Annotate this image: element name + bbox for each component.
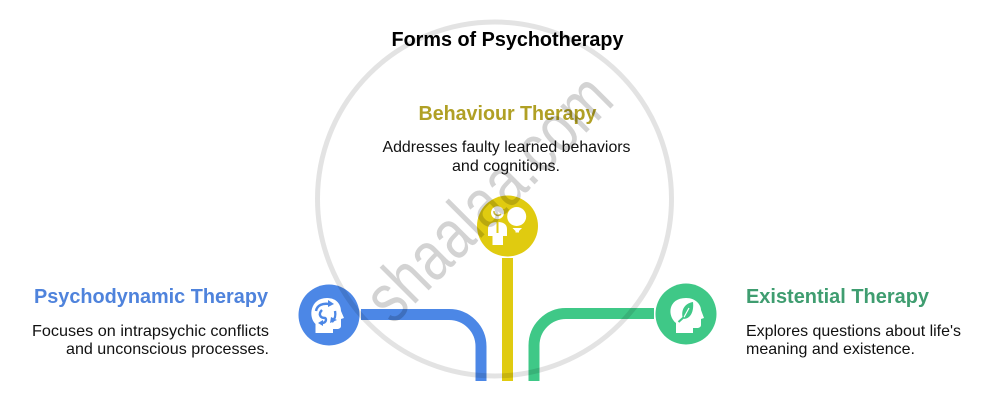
text: behaviour description: and cognitions.: [452, 158, 560, 175]
text: behaviour description: Addresses faulty learned behaviors: [382, 139, 630, 156]
text: existential description: [746, 323, 961, 358]
text: psychodynamic description: and unconscious processes.: [66, 341, 269, 358]
panel: existential therapy: [534, 284, 961, 381]
panel: behaviour therapy: [382, 103, 630, 381]
heading: psychodynamic therapy: Psychodynamic Therapy: [34, 286, 269, 308]
text: existential description: meaning and existence.: [746, 341, 915, 358]
icon: head with arrows: [298, 284, 360, 346]
connector: green: [534, 314, 654, 381]
icon: head with leaf: [656, 284, 716, 344]
panel: psychodynamic therapy: [32, 284, 481, 381]
text: psychodynamic description: Focuses on intrapsychic conflicts: [32, 323, 269, 340]
title: Forms of Psychotherapy: [392, 29, 624, 51]
icon: person and light bulb: [477, 196, 538, 256]
watermark ring: [318, 22, 672, 376]
connector: blue: [361, 314, 481, 381]
heading: behaviour therapy: Behaviour Therapy: [418, 103, 597, 125]
text: psychodynamic description: [32, 323, 269, 358]
text: behaviour description: [382, 139, 630, 175]
text: existential description: Explores questions about life's: [746, 323, 961, 340]
watermark text: shaalaa.com: [348, 58, 627, 337]
heading: existential therapy: Existential Therapy: [746, 286, 930, 308]
connector: yellow: [502, 258, 513, 381]
